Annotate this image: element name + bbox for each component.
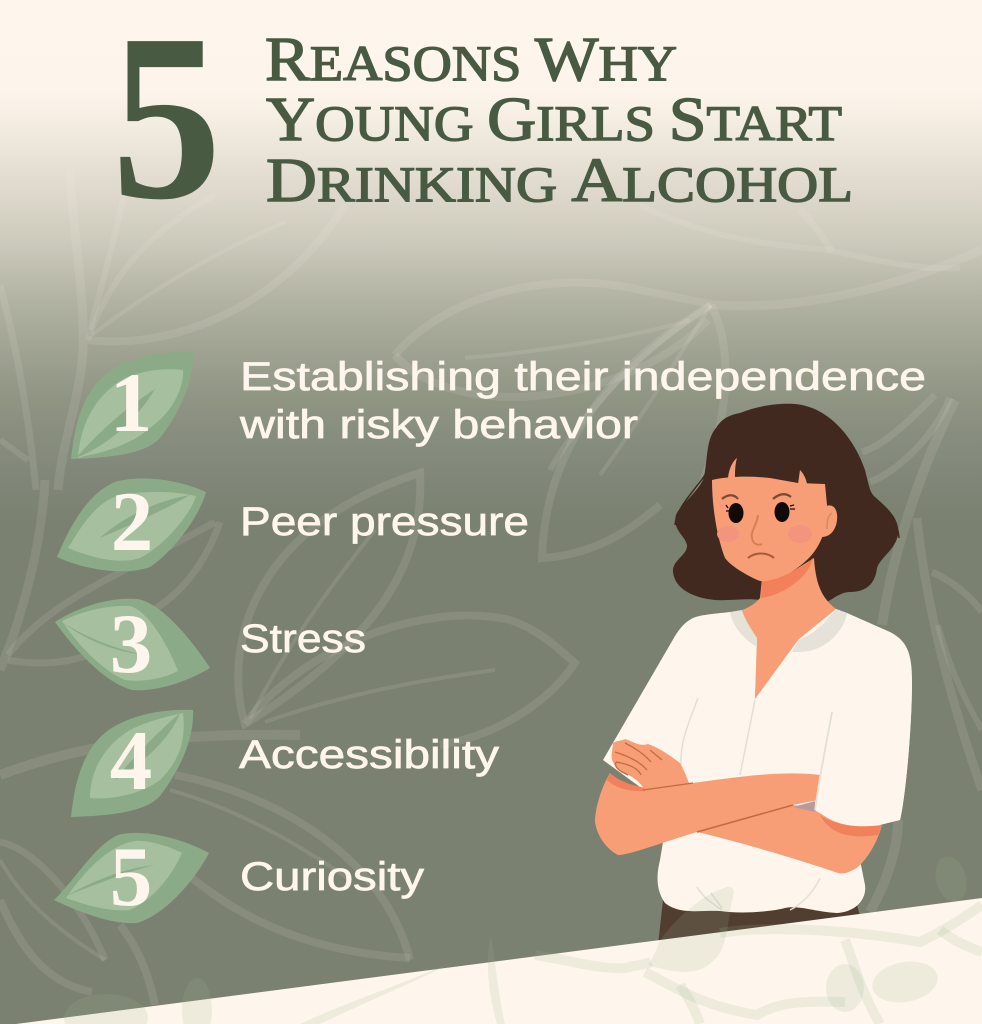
leaf badge 4	[71, 710, 193, 817]
trousers	[658, 900, 860, 945]
leaf badge 3: 3	[110, 597, 152, 691]
collar	[730, 610, 757, 647]
nose	[752, 515, 762, 545]
leaf badge 4: 4	[110, 714, 152, 808]
blouse folds	[681, 698, 820, 910]
reason 5	[54, 830, 424, 924]
reason text 1: Establishing their independence	[240, 355, 926, 399]
reason text 4: Accessibility	[239, 733, 499, 777]
back forearm	[697, 805, 882, 873]
leaf badge 2: 2	[111, 475, 153, 569]
title: DRINKING ALCOHOL	[266, 147, 853, 215]
front forearm	[595, 773, 820, 855]
reason 4	[71, 710, 499, 817]
bottom banner	[16, 898, 982, 1024]
right sleeve	[815, 660, 912, 823]
hair	[673, 404, 898, 603]
cheeks	[717, 526, 739, 542]
reason text 5: Curiosity	[240, 855, 424, 899]
title: YOUNG GIRLS START	[266, 86, 842, 154]
face	[712, 477, 827, 581]
ear	[822, 505, 837, 537]
leaf badge 2	[57, 475, 206, 571]
mouth	[748, 554, 774, 558]
pale botanical overlay	[64, 853, 971, 1024]
reason 2	[57, 475, 529, 571]
reason text 2: Peer pressure	[240, 500, 529, 544]
title	[112, 0, 853, 249]
reason 1	[71, 352, 926, 459]
eyebrows	[722, 495, 738, 499]
neck and chest	[742, 558, 836, 699]
blouse	[603, 609, 912, 913]
leaf badge 5	[54, 830, 209, 924]
heading lines: REASONS WHY	[265, 26, 677, 94]
leaf badge 3	[55, 597, 210, 691]
reason text 1: with risky behavior	[239, 403, 638, 447]
leaf badge 5: 5	[110, 830, 152, 924]
illustration: young woman with crossed arms	[595, 404, 912, 945]
hand	[612, 739, 689, 790]
eyes	[728, 503, 744, 523]
leaf badge 1	[71, 352, 193, 459]
leaf badge 1: 1	[110, 356, 152, 450]
reason 3	[55, 597, 366, 691]
reason text 3: Stress	[240, 617, 366, 661]
reason text 1	[239, 355, 926, 447]
